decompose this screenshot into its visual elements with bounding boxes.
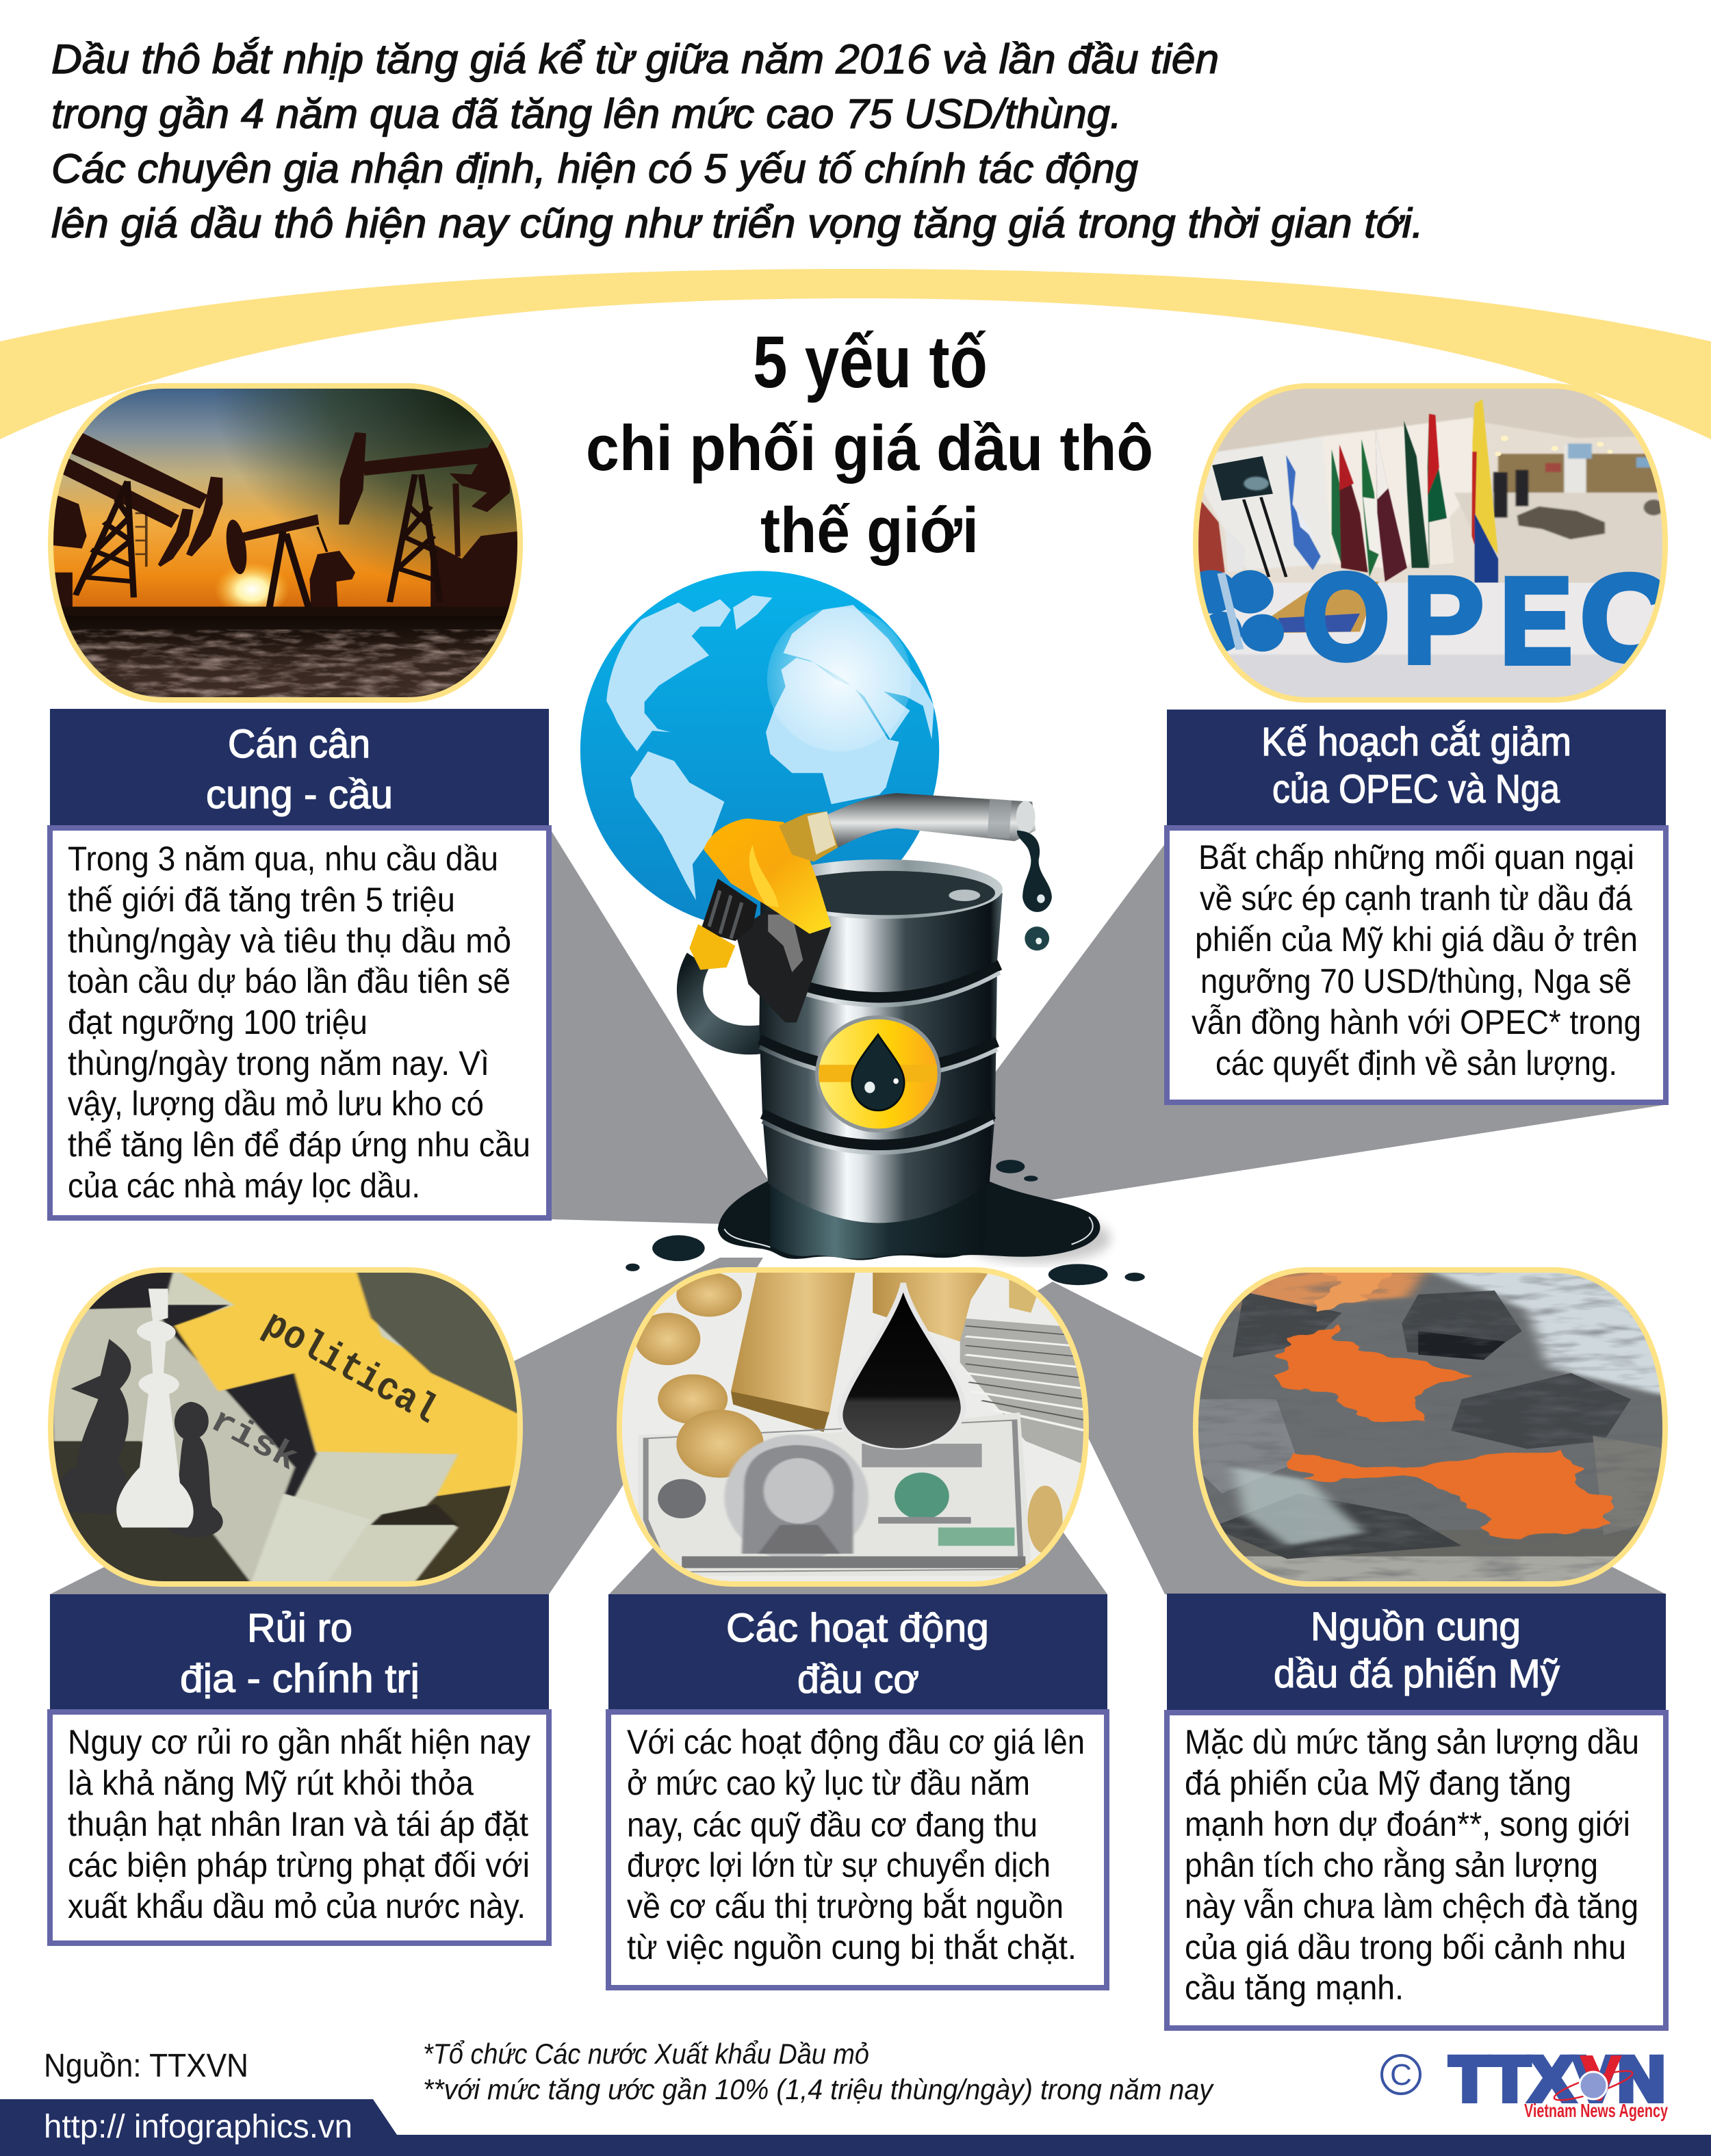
panel body: geopolitical risk bbox=[50, 1712, 549, 1943]
footer band with url: http:// infographics.vn bbox=[44, 2109, 352, 2145]
panel body: US shale supply: mạnh hơn dự đoán**, song giới bbox=[1185, 1805, 1630, 1843]
photo: political risk gears and chess: political bbox=[255, 1303, 445, 1434]
panel heading: OPEC and Russia cuts: của OPEC và Nga bbox=[1272, 767, 1560, 811]
panel heading: speculation bbox=[608, 1594, 1107, 1711]
panel: geopolitical risk bbox=[50, 1594, 549, 1943]
panel body: US shale supply: đá phiến của Mỹ đang tăng bbox=[1185, 1764, 1571, 1802]
panel body: US shale supply: của giá dầu trong bối cảnh nhu bbox=[1185, 1928, 1626, 1966]
panel body: US shale supply: phân tích cho rằng sản lượng bbox=[1185, 1846, 1598, 1884]
panel: supply and demand bbox=[50, 709, 549, 1218]
title bbox=[586, 320, 1153, 566]
panel heading: geopolitical risk bbox=[50, 1594, 549, 1711]
panel: US shale supply bbox=[1167, 1594, 1666, 2028]
panel body: US shale supply: này vẫn chưa làm chệch đà tăng bbox=[1185, 1887, 1638, 1925]
panel body: supply and demand: thế giới đã tăng trên 5 triệu bbox=[68, 881, 455, 919]
globe bbox=[580, 571, 939, 929]
panel body: supply and demand: vậy, lượng dầu mỏ lưu kho có bbox=[68, 1085, 484, 1123]
panel heading: supply and demand bbox=[50, 709, 549, 826]
panel body: supply and demand: Trong 3 năm qua, nhu cầu dầu bbox=[68, 840, 498, 878]
title: thế giới bbox=[760, 494, 979, 566]
panel body: supply and demand: toàn cầu dự báo lần đầu tiên sẽ bbox=[68, 962, 511, 1000]
photo: OPEC flags and sign: P bbox=[1402, 551, 1484, 689]
panel body: geopolitical risk: thuận hạt nhân Iran và tái áp đặt bbox=[68, 1805, 528, 1843]
oil spill bbox=[626, 1160, 1145, 1285]
panel body: geopolitical risk: các biện pháp trừng phạt đối với bbox=[68, 1846, 530, 1884]
panel body: supply and demand: của các nhà máy lọc dầu. bbox=[68, 1167, 420, 1205]
panel body: geopolitical risk: là khả năng Mỹ rút khỏi thỏa bbox=[68, 1764, 474, 1802]
panel heading: supply and demand: cung - cầu bbox=[206, 772, 393, 817]
panel body: OPEC and Russia cuts bbox=[1167, 828, 1666, 1102]
panel body: speculation: ở mức cao kỷ lục từ đầu năm bbox=[627, 1764, 1030, 1802]
panel body: US shale supply: cầu tăng mạnh. bbox=[1185, 1969, 1404, 2007]
photo: OPEC flags and sign: E bbox=[1500, 551, 1573, 690]
panel body: OPEC and Russia cuts: ngưỡng 70 USD/thùng, Nga sẽ bbox=[1200, 962, 1632, 1000]
panel body: speculation: từ việc nguồn cung bị thắt chặt. bbox=[627, 1928, 1077, 1966]
panel heading: speculation: đầu cơ bbox=[797, 1657, 919, 1702]
falling oil drops bbox=[1017, 831, 1052, 950]
panel body: geopolitical risk: xuất khẩu dầu mỏ của nước này. bbox=[68, 1887, 526, 1925]
panel: speculation bbox=[608, 1594, 1107, 1988]
intro text: Dầu thô bắt nhịp tăng giá kể từ giữa năm 2016 và lần đầu tiên bbox=[51, 36, 1219, 82]
photo: OPEC flags and sign: O bbox=[1302, 547, 1390, 686]
panel: OPEC and Russia cuts bbox=[1167, 710, 1666, 1102]
fuel nozzle bbox=[689, 793, 1035, 1022]
panel body: speculation: về cơ cấu thị trường bắt nguồn bbox=[627, 1887, 1064, 1925]
intro text bbox=[51, 36, 1424, 246]
panel body: speculation: được lợi lớn từ sự chuyển dịch bbox=[627, 1846, 1051, 1884]
photo: burning shale rock bbox=[1179, 1266, 1691, 1593]
panel body: OPEC and Russia cuts: phiến của Mỹ khi giá dầu ở trên bbox=[1195, 920, 1638, 959]
photo: gold, dollars and oil drop bbox=[617, 1267, 1089, 1587]
footer band with url bbox=[0, 2099, 1711, 2156]
panel body: supply and demand: thùng/ngày và tiêu thụ dầu mỏ bbox=[68, 922, 511, 960]
panel body: supply and demand bbox=[50, 828, 549, 1218]
panel heading: supply and demand: Cán cân bbox=[228, 722, 370, 766]
panel body: supply and demand: đạt ngưỡng 100 triệu bbox=[68, 1003, 368, 1041]
yellow arc band bbox=[0, 269, 1711, 439]
photo: OPEC flags and sign bbox=[1184, 385, 1677, 706]
panel heading: OPEC and Russia cuts bbox=[1167, 710, 1666, 826]
panel body: speculation: nay, các quỹ đầu cơ đang thu bbox=[627, 1806, 1038, 1844]
TTXVN logo: TTXVN bbox=[1450, 2044, 1665, 2114]
panel body: speculation: Với các hoạt động đầu cơ giá lên bbox=[627, 1723, 1085, 1761]
title: chi phối giá dầu thô bbox=[586, 412, 1153, 484]
panel heading: geopolitical risk: Rủi ro bbox=[247, 1606, 352, 1650]
intro text: trong gần 4 năm qua đã tăng lên mức cao 75 USD/thùng. bbox=[51, 91, 1122, 137]
panel body: supply and demand: thùng/ngày trong năm nay. Vì bbox=[68, 1044, 489, 1082]
panel heading: US shale supply bbox=[1167, 1594, 1666, 1711]
panel body: OPEC and Russia cuts: các quyết định về sản lượng. bbox=[1215, 1044, 1617, 1082]
panel heading: US shale supply: Nguồn cung bbox=[1311, 1605, 1521, 1649]
footnotes: **với mức tăng ước gần 10% (1,4 triệu thùng/ngày) trong năm nay bbox=[423, 2073, 1215, 2105]
panel heading: geopolitical risk: địa - chính trị bbox=[180, 1657, 420, 1701]
photo: OPEC flags and sign: C bbox=[1580, 549, 1674, 686]
footnotes: *Tổ chức Các nước Xuất khẩu Dầu mỏ bbox=[423, 2038, 869, 2070]
hose bbox=[690, 960, 762, 1040]
panel body: speculation bbox=[608, 1712, 1107, 1988]
panel body: US shale supply: Mặc dù mức tăng sản lượng dầu bbox=[1185, 1723, 1639, 1761]
photo: oil pump jacks at sunset bbox=[41, 385, 534, 703]
TTXVN logo bbox=[1382, 2044, 1668, 2121]
panel body: geopolitical risk: Nguy cơ rủi ro gần nhất hiện nay bbox=[68, 1723, 530, 1761]
photo: political risk gears and chess bbox=[33, 1266, 545, 1590]
panel body: OPEC and Russia cuts: Bất chấp những mối quan ngại bbox=[1198, 838, 1634, 876]
panel body: US shale supply bbox=[1167, 1713, 1666, 2028]
intro text: Các chuyên gia nhận định, hiện có 5 yếu tố chính tác động bbox=[51, 146, 1138, 192]
TTXVN logo: C bbox=[1390, 2058, 1412, 2092]
photo: political risk gears and chess: risk bbox=[203, 1401, 304, 1480]
panel heading: OPEC and Russia cuts: Kế hoạch cắt giảm bbox=[1261, 720, 1571, 764]
barrel badge with oil drop bbox=[815, 1015, 941, 1132]
oil barrel with fuel nozzle bbox=[626, 793, 1145, 1285]
panel heading: speculation: Các hoạt động bbox=[726, 1606, 989, 1650]
barrel body bbox=[759, 859, 1003, 1223]
panel body: OPEC and Russia cuts: về sức ép cạnh tranh từ dầu đá bbox=[1200, 879, 1632, 918]
footnotes bbox=[423, 2038, 1215, 2105]
intro text: lên giá dầu thô hiện nay cũng như triển vọng tăng giá trong thời gian tới. bbox=[51, 200, 1424, 246]
title: 5 yếu tố bbox=[753, 320, 988, 403]
panel body: supply and demand: thể tăng lên để đáp ứng nhu cầu bbox=[68, 1126, 530, 1164]
panel body: OPEC and Russia cuts: vẫn đồng hành với OPEC* trong bbox=[1192, 1003, 1641, 1041]
panel heading: US shale supply: dầu đá phiến Mỹ bbox=[1274, 1652, 1560, 1696]
grey connector beams bbox=[50, 831, 1668, 1594]
source: Nguồn: TTXVN bbox=[44, 2048, 248, 2084]
